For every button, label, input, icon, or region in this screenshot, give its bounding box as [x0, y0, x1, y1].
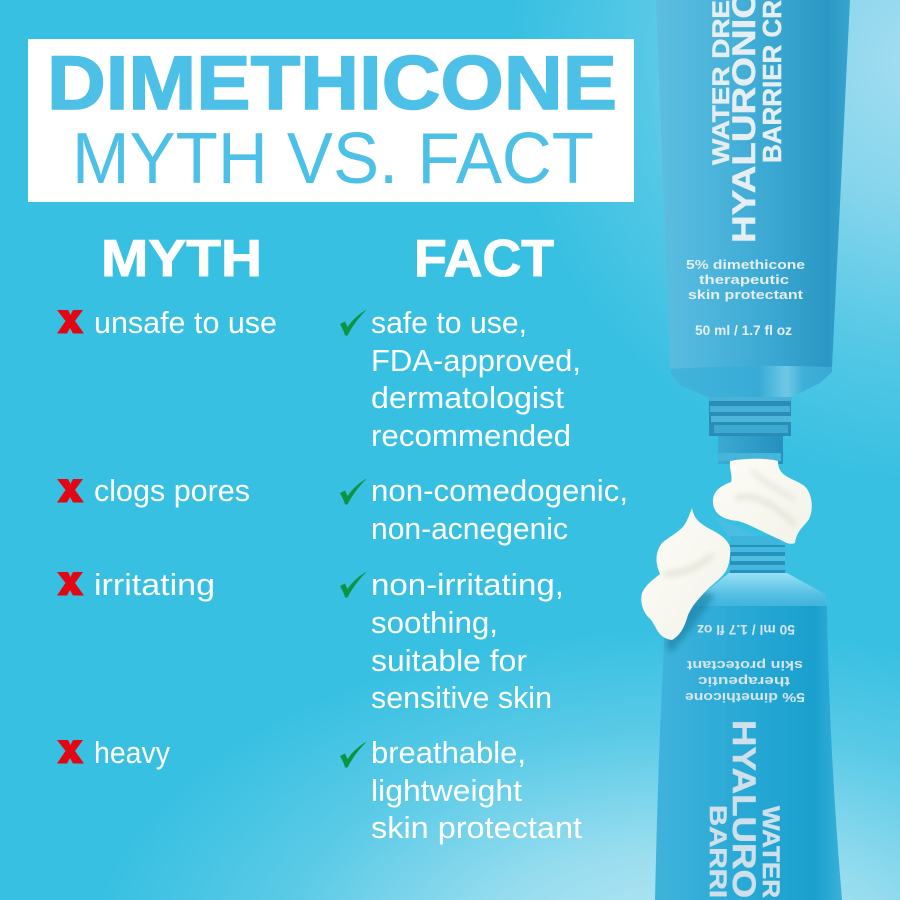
tube label: dimethicone note: skin protectant: [688, 287, 804, 302]
tube neck: [714, 516, 785, 573]
fact text: [371, 305, 581, 453]
row 3: irritating: [57, 567, 564, 715]
heading: myth column: MYTH: [101, 230, 262, 288]
fact text: sensitive skin: [371, 680, 552, 715]
tube label: dimethicone note: [685, 658, 805, 705]
myth text: irritating: [94, 567, 215, 602]
top product tube: [656, 0, 850, 464]
fact text: breathable,: [371, 735, 526, 770]
fact text: non-acnegenic: [371, 511, 568, 546]
fact text: [371, 567, 564, 715]
tube label: dimethicone note: therapeutic: [699, 272, 789, 287]
row 2: clogs pores: [57, 473, 628, 546]
tube label: barrier cream: BARRIER CR: [757, 0, 787, 163]
myth text: clogs pores: [94, 473, 250, 508]
title: dimethicone: DIMETHICONE: [47, 41, 617, 126]
tube label: dimethicone note: 5% dimethicone: [685, 690, 805, 705]
bottom product tube: [655, 516, 842, 900]
heading: fact column: FACT: [414, 230, 554, 288]
icon: red x: [57, 740, 84, 764]
tube label: volume: 50 ml / 1.7 fl oz: [695, 322, 792, 338]
icon: green check: [340, 478, 367, 504]
fact text: [371, 473, 628, 546]
row 4: heavy: [57, 735, 582, 845]
icon: green check: [340, 742, 367, 768]
tube label: dimethicone note: therapeutic: [698, 674, 790, 689]
fact text: dermatologist: [371, 380, 564, 415]
myth text: heavy: [94, 735, 170, 770]
cream on bottom tube: [641, 508, 730, 640]
tube label: dimethicone note: skin protectant: [686, 658, 803, 673]
tube shoulder: [670, 366, 832, 397]
icon: green check: [340, 572, 367, 598]
subtitle: myth vs. fact: MYTH VS. FACT: [72, 119, 594, 199]
tube label: water: WATER: [757, 806, 784, 898]
fact text: non-comedogenic,: [371, 473, 628, 508]
fact text: recommended: [371, 418, 571, 453]
tube label: volume: 50 ml / 1.7 fl oz: [697, 622, 795, 638]
tube neck: [708, 396, 792, 464]
tube label: hyaluronic: HYALURO: [726, 720, 762, 898]
tube body: [655, 606, 842, 900]
fact text: [371, 735, 582, 845]
fact text: safe to use,: [371, 305, 527, 340]
fact text: non-irritating,: [371, 567, 564, 602]
title panel: [28, 39, 634, 202]
fact text: suitable for: [371, 643, 527, 678]
tube label: water dreams: WATER DRE: [708, 0, 735, 165]
myth text: unsafe to use: [94, 305, 277, 340]
tube label: hyaluronic: HYALURONIC: [726, 0, 762, 243]
icon: green check: [340, 310, 367, 336]
tube label: barrier: BARRI: [704, 805, 731, 898]
tube shoulder: [666, 573, 827, 622]
icon: red x: [57, 572, 84, 596]
fact text: skin protectant: [371, 810, 582, 845]
row 1: unsafe to use: [57, 305, 581, 453]
icon: red x: [57, 479, 84, 502]
icon: red x: [57, 310, 84, 334]
cream shadow: [667, 590, 715, 652]
fact text: FDA-approved,: [371, 343, 581, 378]
tube label: dimethicone note: [686, 257, 805, 302]
fact text: lightweight: [371, 773, 522, 808]
cream squeezed from top tube: [713, 459, 812, 544]
fact text: soothing,: [371, 605, 498, 640]
tube label: dimethicone note: 5% dimethicone: [686, 257, 805, 272]
tube body: [656, 0, 850, 369]
